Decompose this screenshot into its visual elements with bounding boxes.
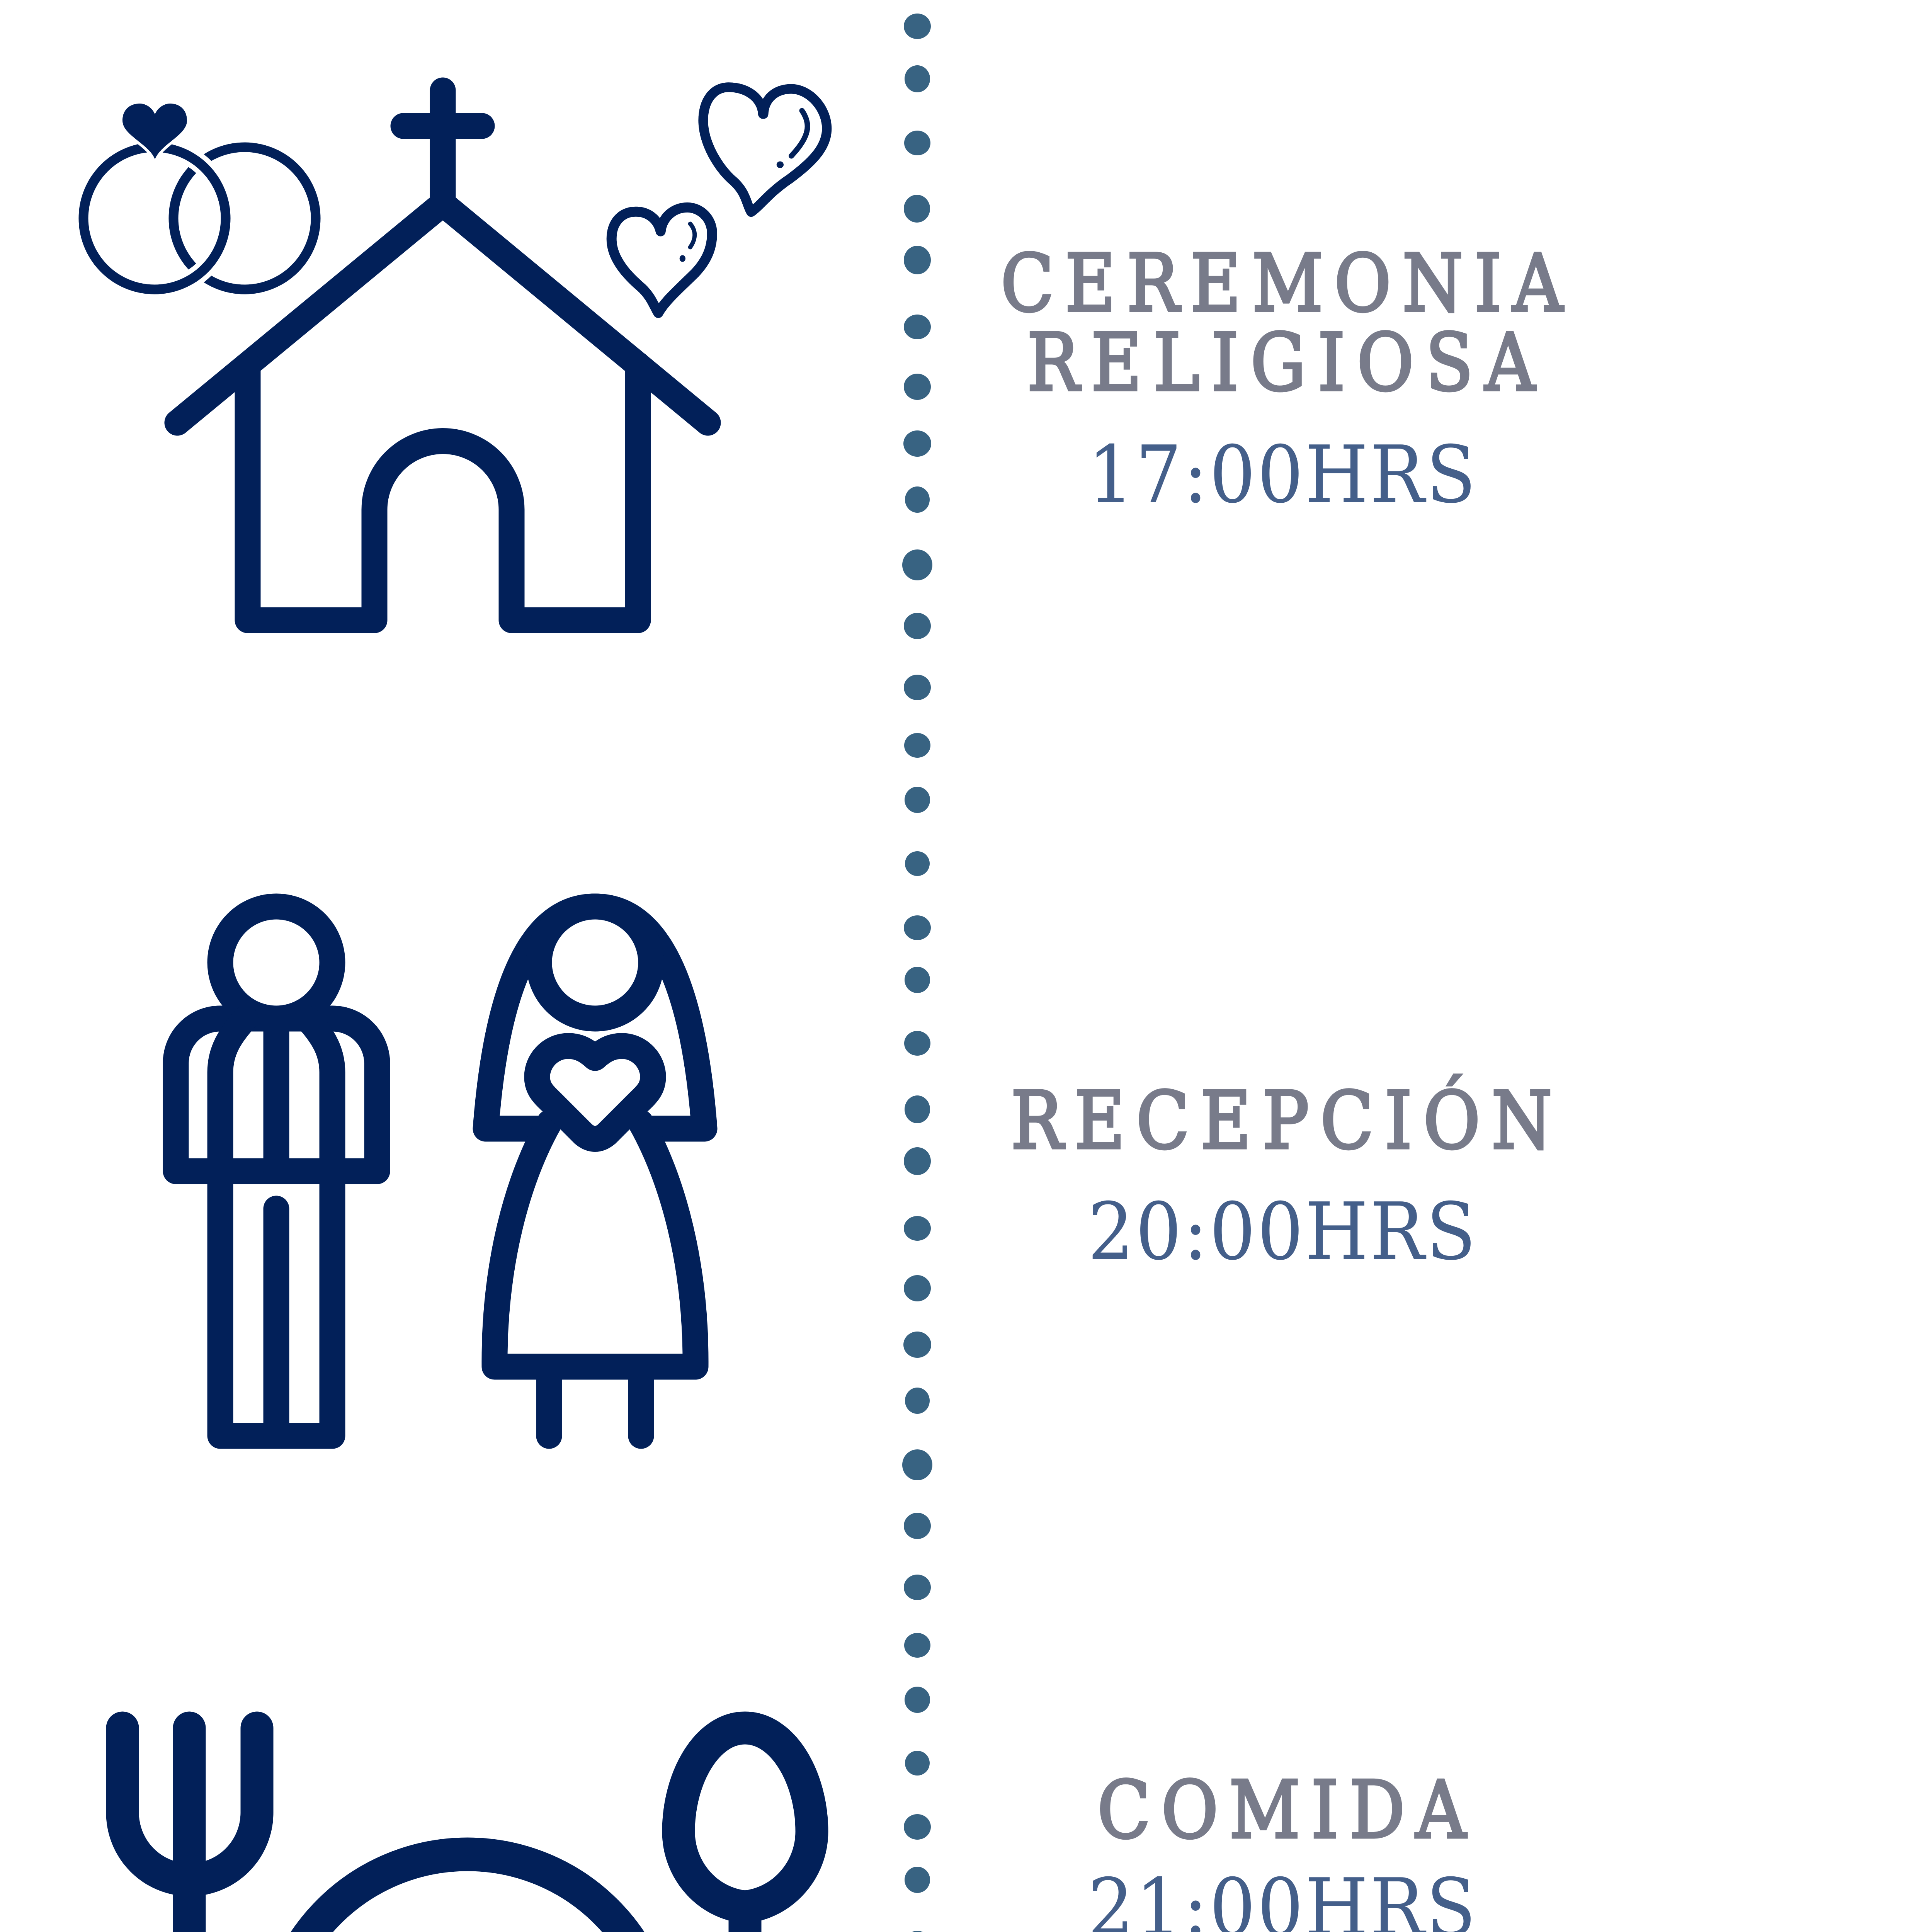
icon: fork [122, 1728, 257, 1932]
event block: reception [1011, 1075, 1552, 1278]
icon: groom [176, 906, 377, 1436]
event block: ceremony [1001, 238, 1564, 521]
heading: recepcion: RECEPCIÓN [1011, 1075, 1552, 1167]
icon: large heart [703, 87, 827, 212]
icon: wedding rings with heart [83, 104, 316, 289]
time: 20:00: 20:00HRS [1088, 1186, 1476, 1278]
event block: meal [1088, 1765, 1476, 1932]
dotted vertical divider [902, 14, 932, 1932]
time: 17:00: 17:00HRS [1088, 429, 1476, 521]
heading: comida: COMIDA [1097, 1765, 1467, 1856]
icon: church [177, 90, 708, 620]
icon: bride [486, 906, 704, 1436]
heading: ceremonia: CEREMONIA [1001, 238, 1564, 330]
icon: plate with heart [272, 1854, 663, 1932]
heading: religiosa: RELIGIOSA [1027, 317, 1536, 409]
icon: small heart [612, 207, 712, 313]
icon: spoon [679, 1728, 812, 1932]
